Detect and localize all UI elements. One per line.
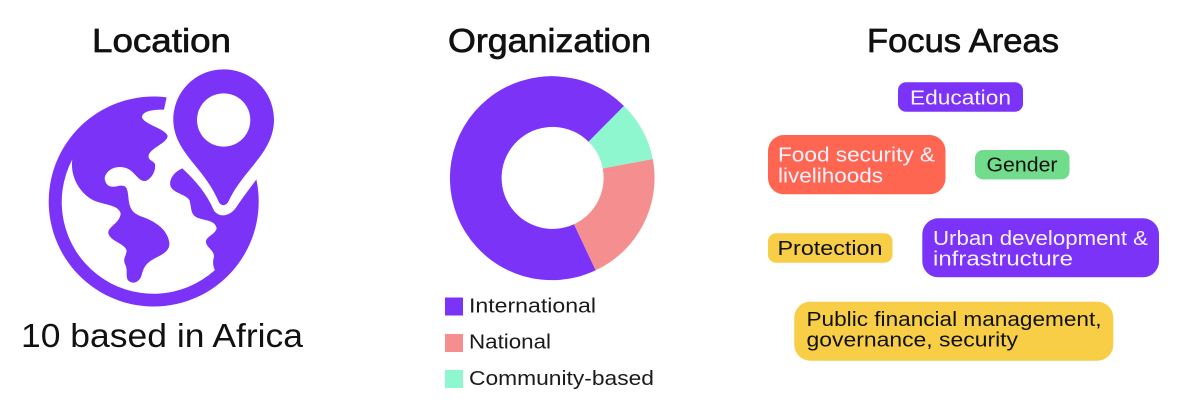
text: 10 based in Africa: 10 based in Africa [21, 317, 304, 354]
legend item: Community-based: Community-based [469, 368, 654, 390]
tag: Public financial management, governance, security: governance, security [806, 330, 1018, 352]
heading: Focus Areas: Focus Areas [867, 22, 1059, 59]
segment: International [450, 76, 624, 280]
donut chart [450, 76, 655, 280]
tag: Gender [975, 150, 1070, 179]
icon: globe with map pin [49, 69, 274, 307]
tag: Urban development & infrastructure: Urban development & [933, 228, 1149, 250]
tag: Food security & livelihoods: Food security & [778, 145, 936, 167]
legend item: International: International [469, 296, 596, 318]
tag: Public financial management, governance, security: Public financial management, [806, 309, 1102, 331]
legend [445, 296, 654, 390]
panel: location [21, 22, 304, 354]
tag: Food security & livelihoods: livelihoods [778, 166, 883, 188]
tag: Education: Education [910, 87, 1011, 109]
icon part: map pin [173, 69, 274, 205]
tag: Protection: Protection [778, 238, 882, 260]
heading: Organization: Organization [448, 22, 651, 59]
tag: Public financial management, governance, security [794, 302, 1113, 361]
panel: organization [445, 22, 655, 390]
legend item: National: National [469, 332, 551, 354]
segment: Community-based [588, 106, 653, 168]
segment: National [574, 159, 655, 270]
panel: focus areas [768, 22, 1159, 361]
tag: Gender: Gender [986, 155, 1058, 177]
tag: Urban development & infrastructure: infrastructure [933, 249, 1073, 271]
tag: Food security & livelihoods [768, 135, 946, 194]
tag: Protection [768, 233, 892, 263]
icon part: globe [49, 97, 259, 307]
legend item: National [445, 332, 551, 354]
tag: Education [898, 82, 1023, 112]
tag: Urban development & infrastructure [922, 218, 1159, 277]
heading: Location: Location [92, 22, 231, 59]
